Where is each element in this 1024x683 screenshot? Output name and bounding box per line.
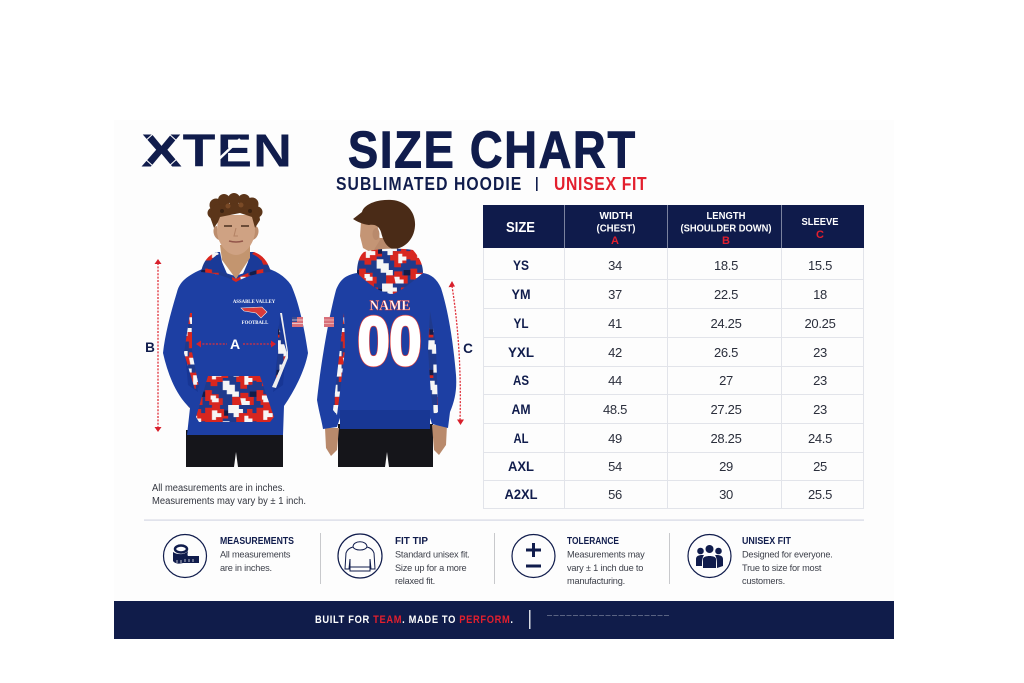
team chest logo <box>233 300 276 326</box>
table row YS: YS <box>513 257 529 273</box>
head <box>360 216 380 253</box>
hands <box>325 425 447 456</box>
flag patch <box>324 317 334 327</box>
info: fit tip: relaxed fit. <box>395 576 435 586</box>
table row AXL: 54 <box>608 459 622 474</box>
table row AS: 44 <box>608 373 622 388</box>
table row YXL <box>508 344 827 360</box>
label C: C <box>463 341 473 356</box>
neck <box>368 238 398 258</box>
logo: XTEN: X <box>141 124 182 176</box>
info: tolerance: vary ± 1 inch due to <box>567 563 643 573</box>
table row AXL: 25 <box>813 459 827 474</box>
neck <box>220 245 250 279</box>
number print: 00 <box>358 304 421 380</box>
measurement note: Measurements may vary by ± 1 inch. <box>152 496 306 507</box>
arrow: A width <box>196 336 276 352</box>
head <box>217 215 255 255</box>
table grid <box>483 248 864 508</box>
table row AXL: 29 <box>719 459 733 474</box>
table row YL: 41 <box>608 316 622 331</box>
info: tolerance: manufacturing. <box>567 576 625 586</box>
table row YS: 15.5 <box>808 258 832 273</box>
table row A2XL: 56 <box>608 487 622 502</box>
subtitle: UNISEX FIT <box>554 173 647 194</box>
info: fit tip: Standard unisex fit. <box>395 550 470 560</box>
hood camo trim <box>201 252 271 282</box>
table header: A <box>611 235 619 247</box>
table row YL: YL <box>514 315 529 331</box>
info: tolerance: Measurements may <box>567 550 645 560</box>
table row AM: 23 <box>813 402 827 417</box>
icon: plus minus <box>512 534 555 578</box>
icon: tape measure <box>164 534 206 578</box>
arrow: B length <box>145 259 162 432</box>
table row AS: 27 <box>719 373 733 388</box>
team chest logo: FOOTBALL <box>242 321 268 326</box>
info: fit tip: FIT TIP <box>395 536 428 547</box>
table header: SIZE <box>506 220 535 236</box>
table row YM: YM <box>512 286 530 302</box>
sleeve shade <box>185 313 286 392</box>
info: measurements: are in inches. <box>220 563 272 573</box>
table header: (CHEST) <box>596 222 636 234</box>
label A: A <box>230 336 240 352</box>
side camo panels <box>333 313 345 415</box>
footer banner <box>114 601 894 639</box>
hoodie body <box>317 273 456 429</box>
table row AXL <box>508 458 827 474</box>
face details <box>224 225 249 227</box>
table row YS <box>513 257 832 273</box>
info: unisex fit: UNISEX FIT <box>742 536 791 547</box>
title: SIZE CHART <box>348 122 635 179</box>
back hoodie figure <box>317 200 456 467</box>
shorts <box>338 424 433 467</box>
table row AM: 27.25 <box>710 402 742 417</box>
hem band <box>340 410 430 429</box>
number print: 00 <box>358 304 421 380</box>
logo: XTEN: E <box>217 124 252 176</box>
banner slogan: BUILT FOR TEAM. MADE TO PERFORM. <box>315 614 513 626</box>
info: measurements: MEASUREMENTS <box>220 536 294 547</box>
table row YM: 22.5 <box>714 287 738 302</box>
info: unisex fit: True to size for most <box>742 563 822 573</box>
measurement note <box>152 483 306 507</box>
table header: LENGTH <box>706 210 746 222</box>
table row A2XL: A2XL <box>504 486 538 502</box>
ear <box>372 228 380 240</box>
hair <box>208 193 262 228</box>
info: measurements <box>164 534 294 578</box>
shorts <box>186 430 283 467</box>
icon: people <box>688 534 731 578</box>
table row AL: AL <box>514 430 529 446</box>
table row AL: 49 <box>608 431 622 446</box>
front hoodie figure <box>163 193 308 467</box>
table row A2XL: 30 <box>719 487 733 502</box>
table header: C <box>816 229 824 241</box>
table row YM: 37 <box>608 287 622 302</box>
side camo panels <box>184 313 199 390</box>
table row AXL: AXL <box>508 458 534 474</box>
hoodie body <box>163 267 308 435</box>
ears <box>213 226 259 240</box>
arrow: C sleeve <box>448 281 473 425</box>
table row YXL: YXL <box>508 344 534 360</box>
table header: SLEEVE <box>802 216 838 228</box>
kangaroo pocket <box>196 376 274 422</box>
table row A2XL <box>504 486 832 502</box>
info: measurements: All measurements <box>220 550 291 560</box>
label B: B <box>145 340 155 355</box>
table row YL: 20.25 <box>804 316 836 331</box>
info: fit tip <box>338 534 470 586</box>
logo: XTEN <box>141 124 292 176</box>
subtitle: SUBLIMATED HOODIE <box>336 173 521 194</box>
table row AL: 28.25 <box>710 431 742 446</box>
table row AL <box>514 430 832 446</box>
table row AS <box>513 372 827 388</box>
table header <box>483 205 864 248</box>
table header: (SHOULDER DOWN) <box>680 222 772 234</box>
info: unisex fit <box>688 534 833 586</box>
logo: XTEN: N <box>253 124 292 176</box>
hood camo <box>357 249 423 294</box>
hood blue inner <box>206 252 265 276</box>
logo: XTEN: T <box>182 124 216 176</box>
hair <box>353 200 415 249</box>
table row AM: AM <box>512 401 530 417</box>
table row YS: 18.5 <box>714 258 738 273</box>
table row AM <box>512 401 827 417</box>
table row YXL: 26.5 <box>714 345 738 360</box>
page background panel <box>114 120 894 601</box>
icon: hoodie <box>338 534 382 578</box>
measurement note: All measurements are in inches. <box>152 483 285 494</box>
table row YXL: 42 <box>608 345 622 360</box>
name print: NAME <box>370 298 410 314</box>
table row YL: 24.25 <box>710 316 742 331</box>
table row AM: 48.5 <box>603 402 627 417</box>
table row YM <box>512 286 827 302</box>
team chest logo: ASSABLE VALLEY <box>233 300 276 305</box>
size table <box>483 205 864 508</box>
table row AL: 24.5 <box>808 431 832 446</box>
subtitle <box>336 173 647 194</box>
table header: B <box>722 235 730 247</box>
table row YS: 34 <box>608 258 622 273</box>
flag patch <box>292 317 303 327</box>
table row AS: AS <box>513 372 529 388</box>
hand left <box>187 397 199 409</box>
info: unisex fit: Designed for everyone. <box>742 550 833 560</box>
table row YXL: 23 <box>813 345 827 360</box>
info: tolerance <box>512 534 645 586</box>
table row A2XL: 25.5 <box>808 487 832 502</box>
table header: WIDTH <box>600 210 632 222</box>
info: fit tip: Size up for a more <box>395 563 467 573</box>
table row YM: 18 <box>813 287 827 302</box>
table row AS: 23 <box>813 373 827 388</box>
info: unisex fit: customers. <box>742 576 785 586</box>
table row YL <box>514 315 836 331</box>
info: tolerance: TOLERANCE <box>567 536 619 547</box>
